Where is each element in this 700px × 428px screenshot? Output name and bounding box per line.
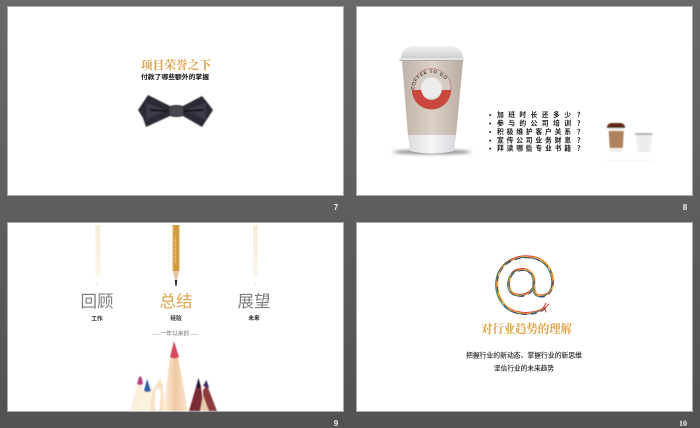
subtitle: slide 7: 付款了哪些额外的掌握 <box>141 72 210 81</box>
question list: 积极维护客户关系 <box>497 127 571 136</box>
panel: slide 7 <box>8 6 344 212</box>
question list: • <box>489 146 492 152</box>
heading: outlook: 展望 <box>238 292 270 311</box>
icon: faded right pencil <box>253 225 258 286</box>
icon: bow tie <box>138 95 213 127</box>
label: work: 工作 <box>91 314 103 322</box>
icon: small brown and white cups <box>605 123 654 160</box>
question list: ？ <box>577 144 584 152</box>
page number 9: 9 <box>334 419 339 428</box>
panel: slide 9 <box>8 222 344 428</box>
question list: 宣传公司业务财息 <box>497 135 571 144</box>
icon: large coffee cup <box>392 46 472 156</box>
question list: • <box>489 137 492 144</box>
icon: central pencil <box>172 225 180 286</box>
caption with rules <box>152 330 198 338</box>
page number 8: 8 <box>683 203 688 212</box>
icon: at sign made of coloured strings <box>496 256 554 314</box>
title: slide 10 heading: 对行业趋势的理解 <box>481 321 572 336</box>
logo: coffee to go badge: COFFEE TO GO <box>411 70 447 90</box>
question list: 拜读哪些专业书籍 <box>497 144 571 152</box>
heading: review: 回顾 <box>80 293 114 311</box>
body text line 1: 把握行业的新动态、掌握行业的新思维 <box>466 350 582 360</box>
image: coloured pencils <box>130 341 217 411</box>
title: slide 7 heading: 项目荣誉之下 <box>141 58 212 72</box>
question list: ？ <box>577 128 584 136</box>
question list: ？ <box>577 120 584 128</box>
caption with rules: 一年以来的 <box>160 330 190 338</box>
question list: • <box>489 129 492 136</box>
page number 10: 10 <box>679 419 687 428</box>
question list: ？ <box>577 111 584 119</box>
question list <box>489 110 584 152</box>
question list: • <box>489 120 492 128</box>
question list: • <box>489 112 492 119</box>
icon: faded left pencil <box>96 225 100 286</box>
label: future: 未来 <box>248 314 260 322</box>
question list: 参与的公司培训 <box>497 118 571 128</box>
label: experience: 经验 <box>170 314 182 322</box>
question list: 加班时长还多少 <box>497 110 571 119</box>
panel: slide 8 <box>356 6 693 212</box>
panel: slide 10 <box>356 222 692 428</box>
heading: summary: 总结 <box>160 292 192 311</box>
question list: ？ <box>577 136 584 144</box>
page number 7: 7 <box>334 203 339 212</box>
body text line 2: 坚信行业的未来趋势 <box>494 364 554 372</box>
